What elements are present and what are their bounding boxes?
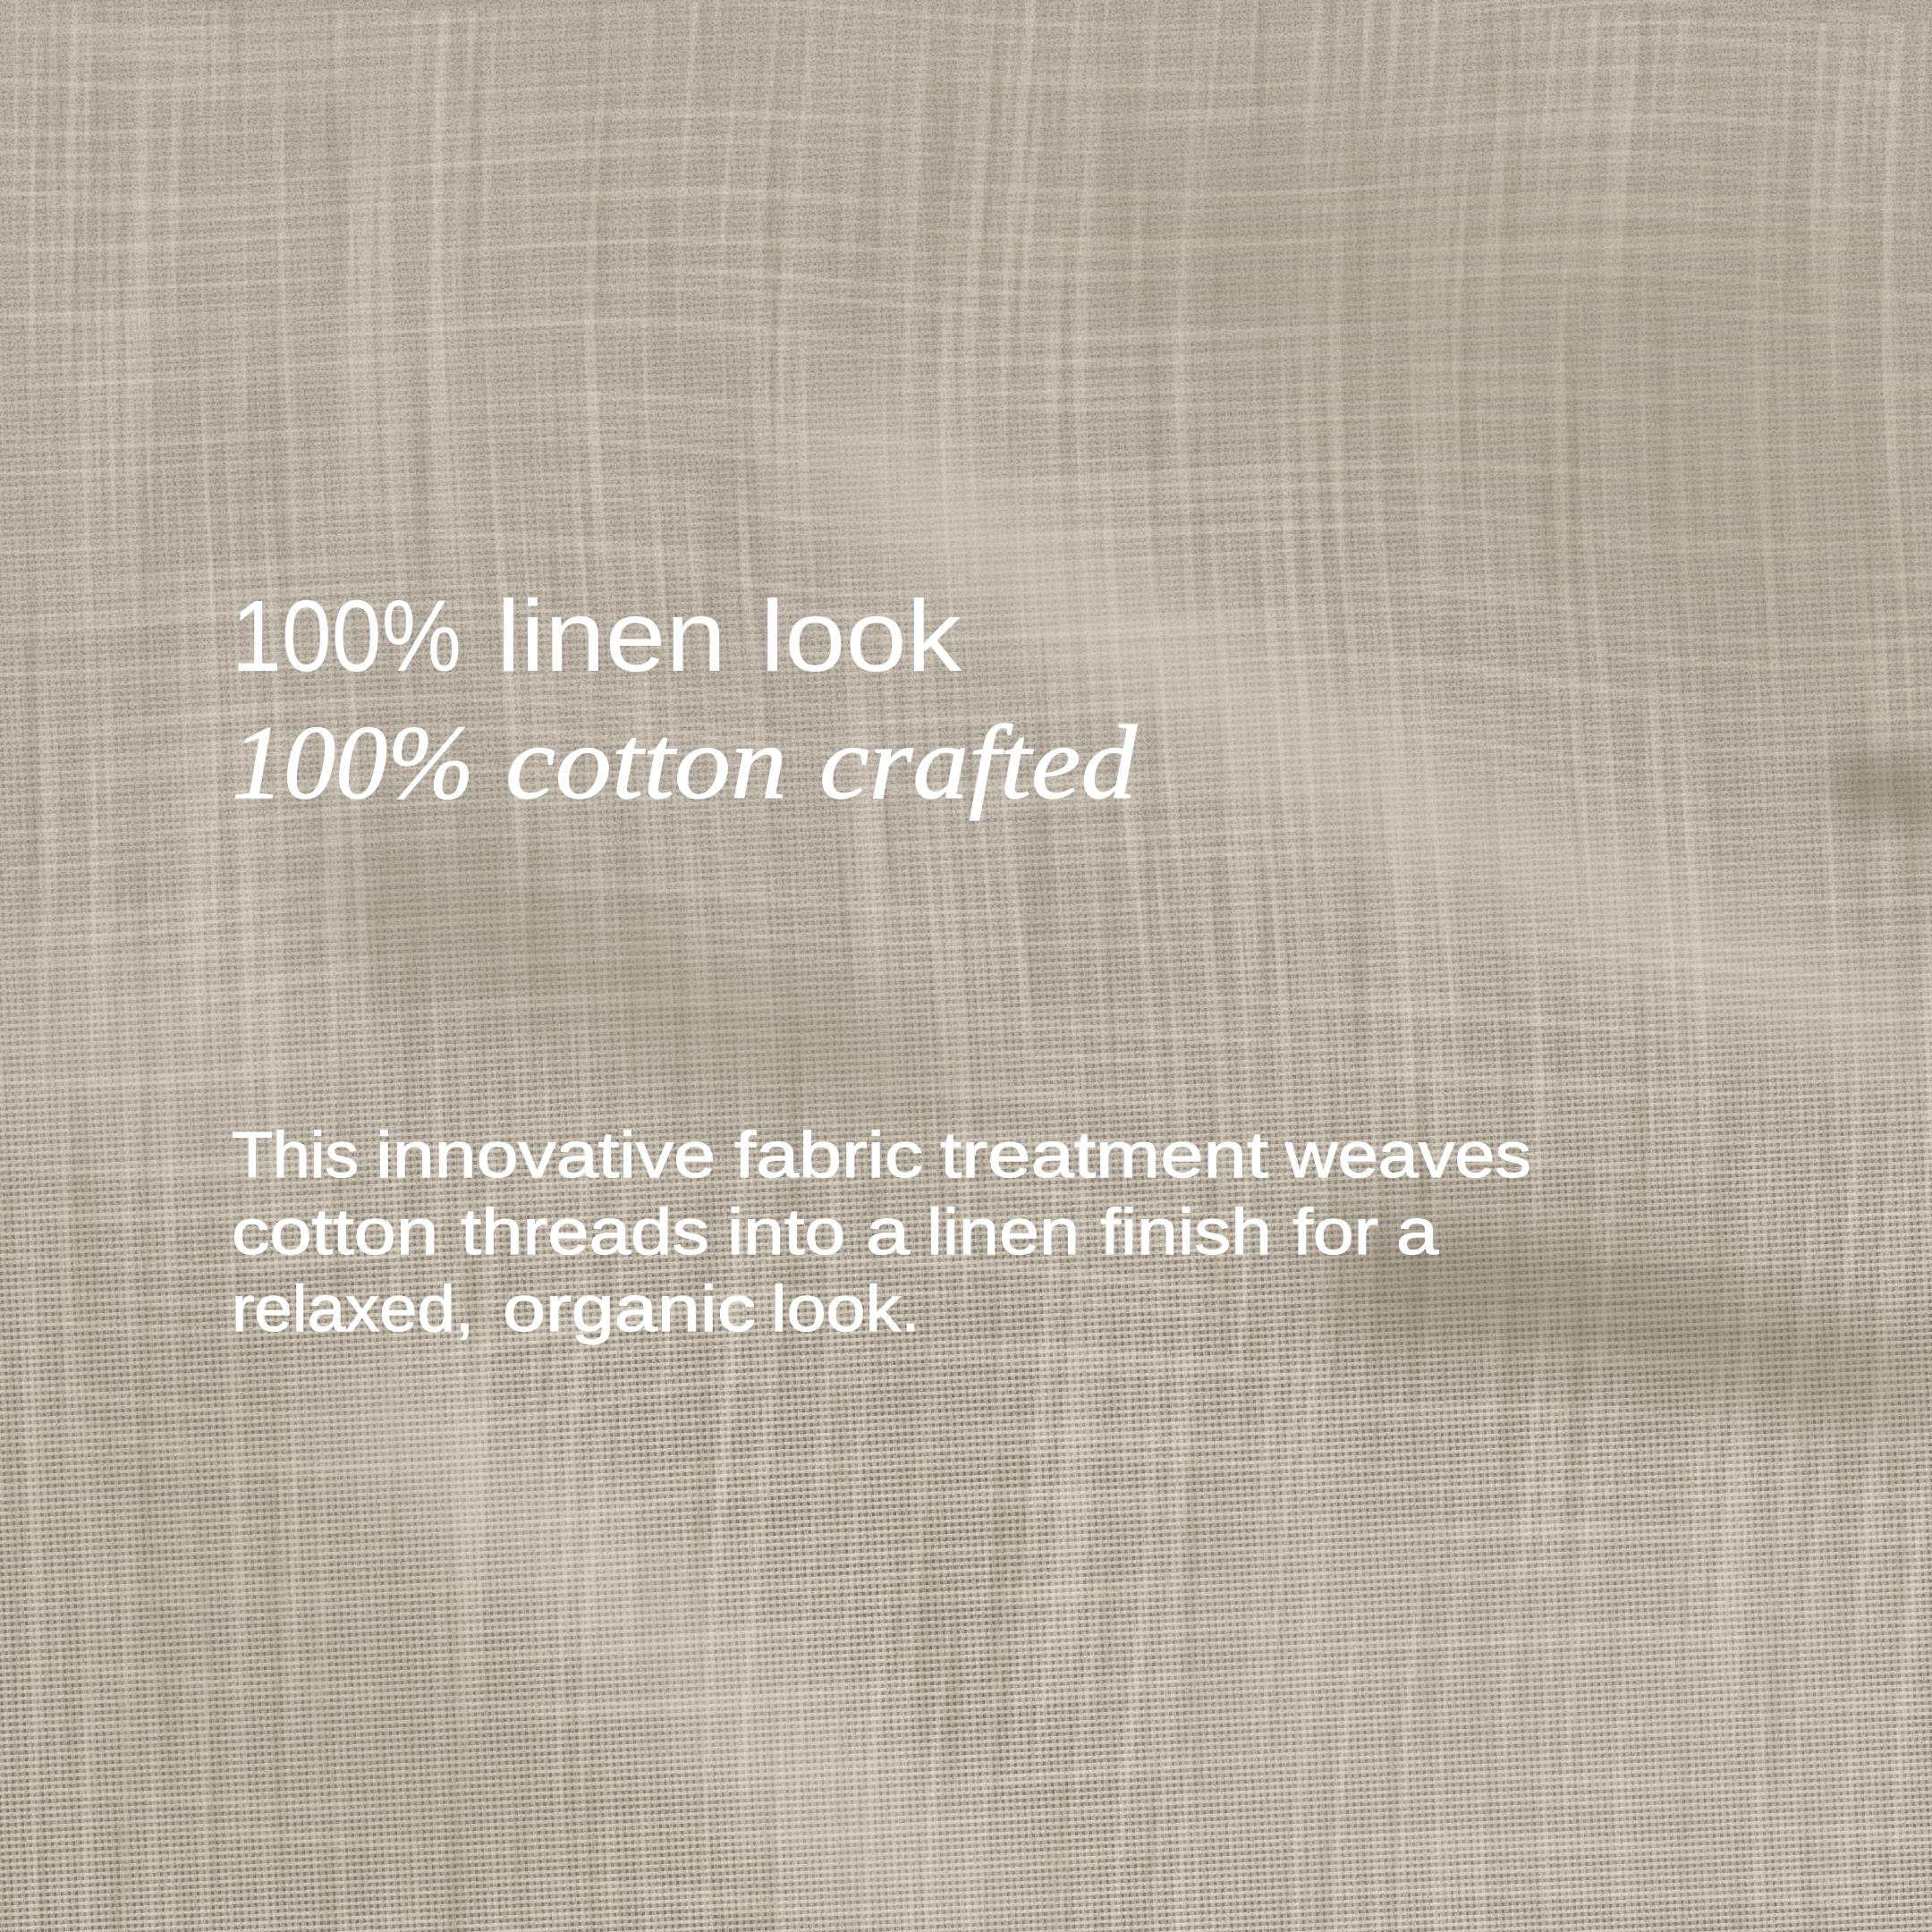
body text: organic <box>503 1274 756 1345</box>
body text: relaxed, <box>232 1274 474 1345</box>
heading line: 100% linen look: linen <box>496 580 726 692</box>
body text <box>232 1120 1531 1345</box>
body text: This <box>232 1120 359 1191</box>
body text: threads <box>461 1197 709 1268</box>
body text: a <box>1396 1197 1439 1268</box>
body text: cotton <box>232 1197 438 1268</box>
body text: innovative <box>376 1120 716 1191</box>
heading line: 100% linen look: 100% <box>232 580 462 692</box>
body text: look. <box>771 1274 920 1345</box>
body text: weaves <box>1284 1120 1531 1191</box>
heading line: 100% cotton crafted: crafted <box>819 704 1138 821</box>
body text: fabric <box>734 1120 923 1191</box>
body text: for <box>1292 1197 1378 1268</box>
body text: treatment <box>940 1120 1268 1191</box>
heading line: 100% cotton crafted: cotton <box>505 704 787 821</box>
heading line: 100% linen look: look <box>760 580 962 692</box>
body text: a <box>866 1197 911 1268</box>
heading <box>232 580 1138 821</box>
body text: linen <box>927 1197 1080 1268</box>
body text: finish <box>1100 1197 1272 1268</box>
heading line: 100% cotton crafted: 100% <box>232 704 474 821</box>
body text: into <box>727 1197 845 1268</box>
